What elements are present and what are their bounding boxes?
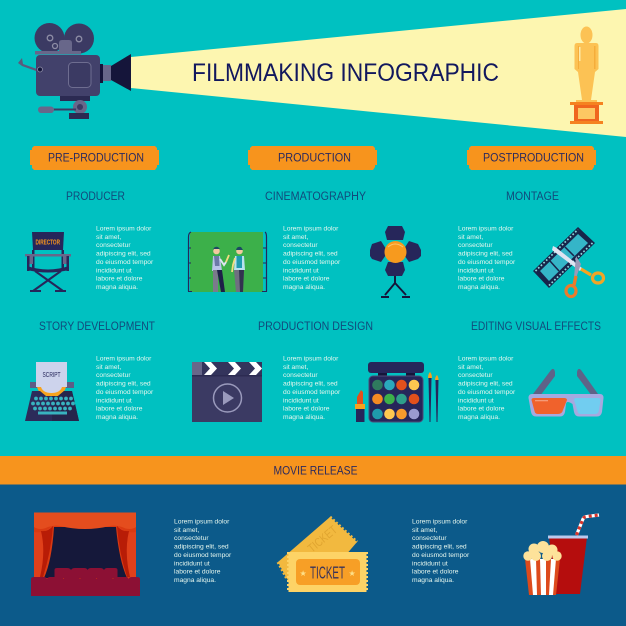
heading pill: pre-production: PRE-PRODUCTION [48, 152, 144, 164]
text block: editing visual effects: incididunt ut [458, 397, 494, 404]
heading pill: production: PRODUCTION [278, 152, 351, 164]
text block: cinematography: do eiusmod tempor [283, 259, 341, 266]
icon: golden statuette [570, 26, 603, 124]
icon: green screen with actors [188, 232, 267, 292]
text block: tickets: incididunt ut [412, 560, 448, 567]
heading pill: pre-production [30, 146, 159, 170]
icon: director chair [25, 232, 71, 292]
text block: producer: adipiscing elit, sed [96, 251, 151, 258]
icon: 3D glasses [528, 369, 604, 416]
heading pill: postproduction [467, 146, 596, 170]
text block: montage: Lorem ipsum dolor [458, 226, 514, 232]
text block: story development: labore et dolore [96, 406, 143, 413]
text block: cinematography: adipiscing elit, sed [283, 251, 338, 258]
text block: editing visual effects: sit amet, [458, 364, 483, 371]
icon: typewriter: SCRIPT [42, 372, 61, 379]
text block: theatre: incididunt ut [174, 560, 210, 567]
text block: cinematography: magna aliqua. [283, 284, 325, 291]
text block: theatre: consectetur [174, 535, 209, 542]
text block: production design: adipiscing elit, sed [283, 381, 338, 388]
text block: montage: do eiusmod tempor [458, 259, 516, 266]
text block: story development: do eiusmod tempor [96, 389, 154, 396]
text block: producer: Lorem ipsum dolor [96, 226, 152, 232]
text block: montage: magna aliqua. [458, 284, 500, 291]
text block: theatre: do eiusmod tempor [174, 552, 232, 559]
section heading: editing visual effects: EDITING VISUAL EFFECTS [471, 321, 601, 333]
text block: story development: adipiscing elit, sed [96, 381, 151, 388]
text block: montage: labore et dolore [458, 276, 505, 283]
text block: story development: sit amet, [96, 364, 121, 371]
icon: tickets: TICKET [310, 562, 345, 582]
text block: production design: labore et dolore [283, 406, 330, 413]
section heading: production design: PRODUCTION DESIGN [258, 321, 373, 333]
section heading: cinematography: CINEMATOGRAPHY [265, 191, 366, 203]
text block: producer: sit amet, [96, 234, 121, 241]
text block: tickets: consectetur [412, 535, 447, 542]
icon: studio spotlight [370, 226, 421, 297]
text block: montage: sit amet, [458, 234, 483, 241]
panel: movie release background [0, 484, 626, 626]
text block: producer: labore et dolore [96, 276, 143, 283]
text block: montage: consectetur [458, 242, 493, 249]
text block: cinematography: consectetur [283, 242, 318, 249]
text block: cinematography: incididunt ut [283, 267, 319, 274]
text block: story development: magna aliqua. [96, 414, 138, 421]
text block: editing visual effects: magna aliqua. [458, 414, 500, 421]
icon: makeup palette and brushes [355, 362, 438, 422]
text block: theatre: adipiscing elit, sed [174, 544, 229, 551]
icon: tickets: ★ [300, 569, 307, 578]
icon: tickets: ★ [348, 569, 356, 578]
text block: theatre: sit amet, [174, 527, 199, 534]
heading pill: production [248, 146, 377, 170]
text block: editing visual effects: Lorem ipsum dolor [458, 356, 514, 362]
text block: editing visual effects: labore et dolore [458, 406, 505, 413]
text block: producer: magna aliqua. [96, 284, 138, 291]
section heading: story development: STORY DEVELOPMENT [39, 321, 155, 333]
icon: popcorn and soda [523, 515, 599, 595]
text block: story development: incididunt ut [96, 397, 132, 404]
icon: theatre stage with seats [31, 512, 140, 596]
text block: production design: incididunt ut [283, 397, 319, 404]
text block: tickets: magna aliqua. [412, 577, 454, 584]
text block: theatre: labore et dolore [174, 569, 221, 576]
icon: clapperboard [192, 362, 262, 422]
icon: tickets: TICKET [305, 522, 340, 555]
icon: film strip and scissors [533, 227, 604, 296]
text block: producer: consectetur [96, 242, 131, 249]
text block: tickets: Lorem ipsum dolor [412, 518, 468, 526]
band: movie release: MOVIE RELEASE [274, 465, 358, 477]
text block: editing visual effects: adipiscing elit, sed [458, 381, 513, 388]
section heading: producer: PRODUCER [66, 191, 125, 203]
text block: cinematography: labore et dolore [283, 276, 330, 283]
text block: cinematography: sit amet, [283, 234, 308, 241]
text block: tickets: labore et dolore [412, 569, 459, 576]
text block: story development: Lorem ipsum dolor [96, 356, 152, 362]
text block: producer: incididunt ut [96, 267, 132, 274]
icon: typewriter [25, 362, 79, 421]
text block: editing visual effects: do eiusmod tempor [458, 389, 516, 396]
text block: production design: consectetur [283, 372, 318, 379]
text block: montage: incididunt ut [458, 267, 494, 274]
band: movie release [0, 456, 626, 484]
heading pill: postproduction: POSTPRODUCTION [483, 152, 584, 164]
text block: story development: consectetur [96, 372, 131, 379]
text block: tickets: do eiusmod tempor [412, 552, 470, 559]
text block: cinematography: Lorem ipsum dolor [283, 226, 339, 232]
text block: montage: adipiscing elit, sed [458, 251, 513, 258]
text block: theatre: Lorem ipsum dolor [174, 518, 230, 526]
text block: tickets: adipiscing elit, sed [412, 544, 467, 551]
icon: director chair: DIRECTOR [36, 240, 60, 246]
text block: theatre: magna aliqua. [174, 577, 216, 584]
text block: production design: sit amet, [283, 364, 308, 371]
section heading: montage: MONTAGE [506, 191, 559, 203]
text block: production design: Lorem ipsum dolor [283, 356, 339, 362]
text block: production design: magna aliqua. [283, 414, 325, 421]
icon: film camera [18, 23, 131, 119]
text block: tickets: sit amet, [412, 527, 437, 534]
icon: tickets [278, 517, 366, 592]
title: FILMMAKING INFOGRAPHIC [192, 59, 499, 87]
text block: editing visual effects: consectetur [458, 372, 493, 379]
text block: production design: do eiusmod tempor [283, 389, 341, 396]
light beam [131, 9, 626, 137]
text block: producer: do eiusmod tempor [96, 259, 154, 266]
